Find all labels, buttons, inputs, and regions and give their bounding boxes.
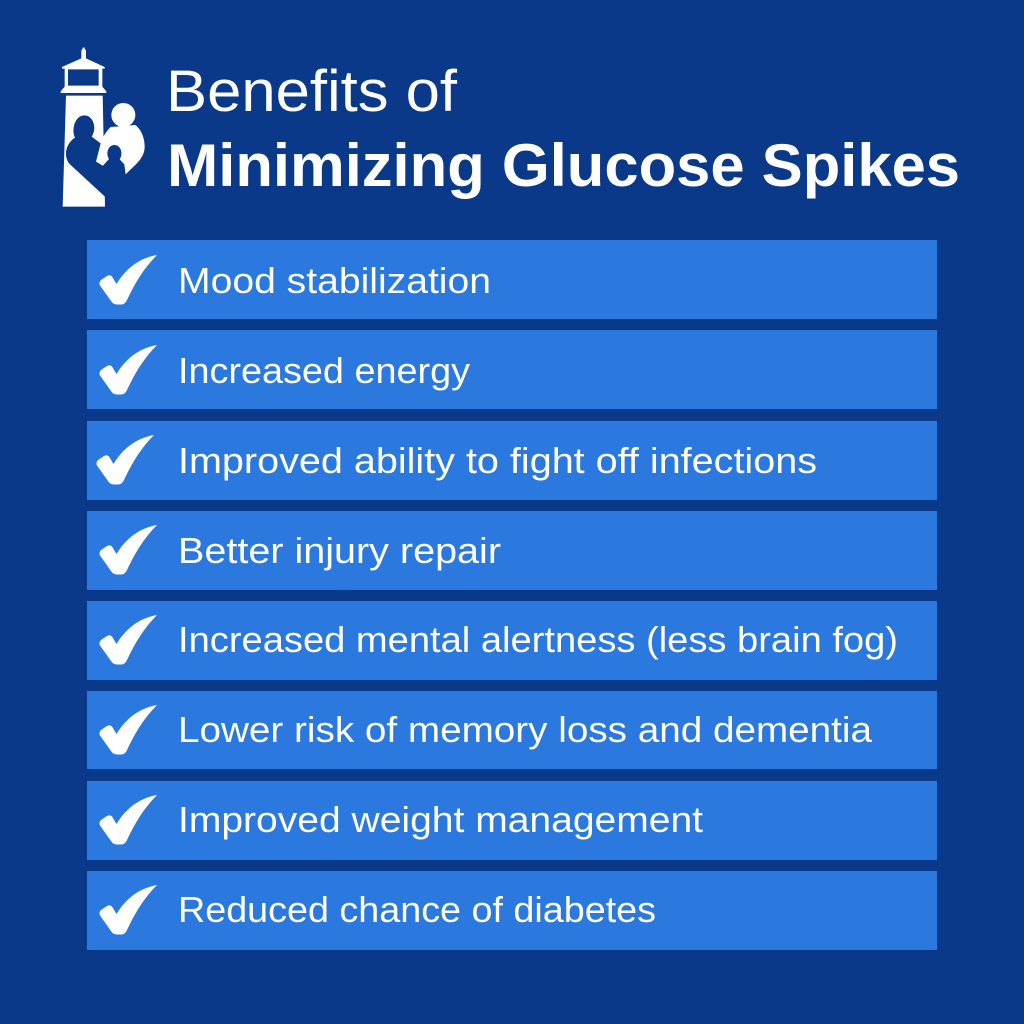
row: increased mental alertness (87, 601, 937, 680)
title line 1: Benefits of (166, 59, 458, 124)
row: increased energy (87, 330, 937, 409)
row: improved weight management (87, 781, 937, 860)
row: reduced chance of diabetes (87, 871, 937, 950)
row: better injury repair (87, 511, 937, 590)
row: improved ability to fight off infections: Improved ability to fight off infections (178, 440, 817, 481)
row: reduced chance of diabetes: Reduced chance of diabetes (178, 889, 656, 930)
title (166, 59, 960, 199)
row: improved ability to fight off infections (87, 421, 937, 500)
panel: benefits list (87, 240, 937, 950)
row: increased mental alertness: Increased mental alertness (less brain fog) (178, 619, 898, 660)
title line 2: Minimizing Glucose Spikes (167, 132, 960, 199)
row: better injury repair: Better injury repair (178, 530, 501, 571)
icon: lighthouse and family logo (61, 48, 145, 207)
row: lower risk of memory loss and dementia: Lower risk of memory loss and dementia (178, 709, 873, 750)
row: mood stabilization: Mood stabilization (178, 260, 491, 301)
row: mood stabilization (87, 240, 937, 319)
row: lower risk of memory loss and dementia (87, 691, 937, 769)
row: increased energy: Increased energy (178, 350, 470, 391)
row: improved weight management: Improved weight management (178, 799, 703, 840)
